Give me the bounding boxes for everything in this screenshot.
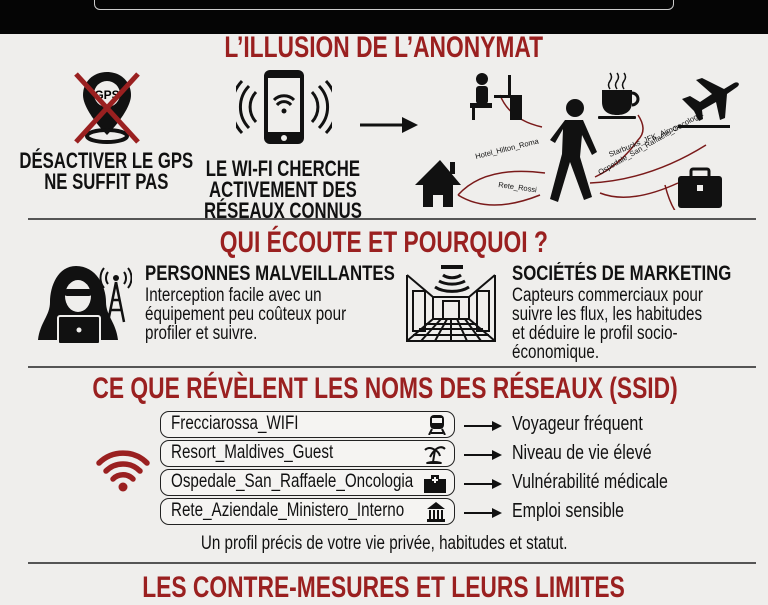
- text: marketing: SOCIÉTÉS DE MARKETING: [512, 262, 731, 285]
- coffee: [598, 73, 638, 119]
- arrows: [464, 421, 502, 518]
- icon: hacker: [38, 266, 132, 343]
- diagram: tracked movement: Rete_Rossi: [498, 180, 538, 194]
- meanings: Emploi sensible: [512, 500, 624, 522]
- title: countermeasures: LES CONTRE-MESURES ET LEURS LIMITES: [143, 571, 625, 604]
- meanings: [512, 413, 668, 522]
- briefcase: [678, 169, 722, 208]
- caption: GPS: NE SUFFIT PAS: [44, 169, 168, 194]
- title: who listens: QUI ÉCOUTE ET POURQUOI ?: [220, 226, 548, 259]
- top black bar: [0, 0, 768, 34]
- text: marketing: économique.: [512, 342, 599, 363]
- icon: mall sensors: [406, 265, 496, 342]
- arrow: [360, 117, 418, 133]
- caption: profile: Un profil précis de votre vie privée, habitudes et statut.: [201, 533, 567, 554]
- plane: [678, 78, 739, 128]
- desk: [470, 73, 522, 120]
- diagram: tracked movement: Hotel_Hilton_Roma: [474, 136, 540, 161]
- person: [550, 99, 597, 202]
- text: malicious: PERSONNES MALVEILLANTES: [145, 262, 395, 285]
- ssid list: Frecciarossa_WIFI: [171, 413, 299, 434]
- title: illusion: L’ILLUSION DE L’ANONYMAT: [225, 31, 543, 64]
- caption: GPS: DÉSACTIVER LE GPS: [19, 148, 193, 173]
- meanings: Niveau de vie élevé: [512, 442, 652, 464]
- text: marketing: suivre les flux, les habitudes: [512, 304, 702, 325]
- text: marketing: Capteurs commerciaux pour: [512, 285, 703, 306]
- house: [415, 160, 461, 207]
- caption: GPS: [19, 148, 193, 194]
- caption: wifi: ACTIVEMENT DES: [209, 177, 357, 202]
- caption: wifi: RÉSEAUX CONNUS: [204, 198, 362, 223]
- ssid list: Ospedale_San_Raffaele_Oncologia: [171, 471, 413, 492]
- caption: wifi: [204, 156, 362, 223]
- diagram: tracked movement: Ospedale_San_Raffaele_Oncologia: [596, 109, 705, 177]
- text: malicious: Interception facile avec un: [145, 285, 322, 306]
- text: malicious: [145, 262, 395, 344]
- text: marketing: [512, 262, 731, 363]
- icon: GPS crossed: [74, 72, 140, 144]
- meanings: Vulnérabilité médicale: [512, 471, 668, 493]
- title: SSID: CE QUE RÉVÈLENT LES NOMS DES RÉSEAUX (SSID): [92, 372, 678, 405]
- diagram: tracked movement: Starbucks_JFK_Airport: [607, 121, 683, 159]
- ssid list: [160, 411, 455, 525]
- text: malicious: profiler et suivre.: [145, 323, 257, 344]
- text: malicious: équipement peu coûteux pour: [145, 304, 346, 325]
- ssid list: Rete_Aziendale_Ministero_Interno: [171, 500, 404, 521]
- icon: GPS crossed: GPS: [94, 88, 120, 102]
- icon: red wifi: [96, 450, 150, 492]
- text: marketing: et déduire le profil socio-: [512, 323, 678, 344]
- icon: phone wifi: [236, 70, 332, 144]
- ssid list: Resort_Maldives_Guest: [171, 442, 333, 463]
- meanings: Voyageur fréquent: [512, 413, 643, 435]
- diagram: tracked movement: [415, 72, 739, 210]
- caption: wifi: LE WI-FI CHERCHE: [206, 156, 360, 181]
